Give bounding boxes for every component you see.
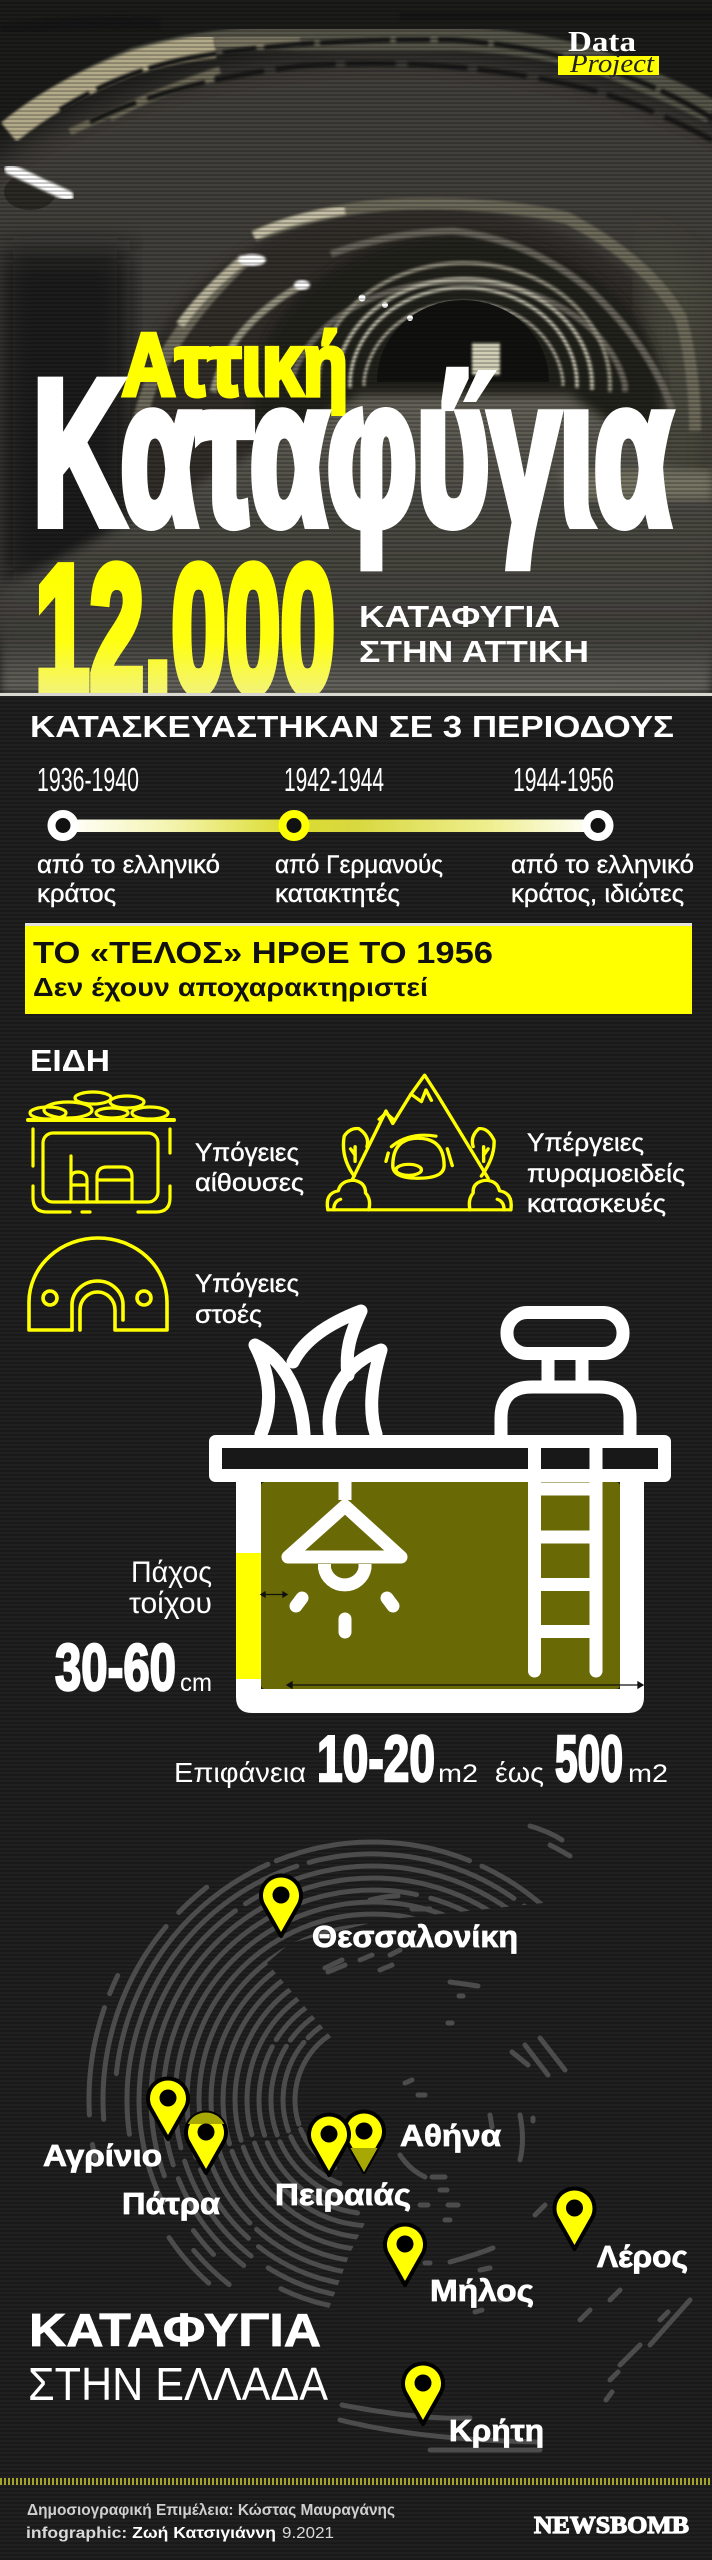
callout: the end in 1956 (25, 923, 692, 1014)
stat: 12.000 shelters: ΚΑΤΑΦΥΓΙΑ (359, 599, 560, 634)
credits (26, 2502, 395, 2542)
title: Αττική (122, 315, 348, 414)
period descriptions (37, 851, 694, 908)
label: pyramid structures: Υπέργειες (527, 1129, 644, 1157)
period descriptions: κράτος (37, 880, 116, 908)
stat: 12.000 shelters: ΣΤΗΝ ΑΤΤΙΚΗ (359, 634, 589, 669)
lights (4, 174, 56, 210)
period years: 1936-1940 (37, 761, 139, 798)
label: underground halls: Υπόγειες (195, 1139, 299, 1167)
icon: pyramid-shaped above-ground structure (327, 1075, 511, 1210)
icon: underground hall (28, 1092, 174, 1212)
label: surface area: έως (495, 1757, 544, 1788)
stat: 12.000 shelters (38, 560, 587, 693)
map of Greece: fingerprint arcs (86, 1824, 692, 2452)
timeline (37, 761, 694, 908)
pin: Patra (186, 2112, 226, 2173)
period years (37, 761, 614, 798)
period years: 1942-1944 (284, 761, 384, 798)
pin: Athina (344, 2111, 384, 2172)
label: underground halls (195, 1139, 304, 1197)
label: galleries (195, 1270, 299, 1329)
lamp (288, 1482, 401, 1632)
pin: Peiraias (309, 2114, 349, 2175)
heading: shelters in Greece: ΣΤΗΝ ΕΛΛΑΔΑ (28, 2358, 328, 2410)
map city labels: Πάτρα (122, 2186, 220, 2221)
heading: three periods: ΚΑΤΑΣΚΕΥΑΣΤΗΚΑΝ ΣΕ 3 ΠΕΡΙΟΔΟΥΣ (30, 709, 674, 744)
label: galleries: Υπόγειες (195, 1270, 299, 1298)
icon: underground galleries (29, 1238, 167, 1330)
label: wall thickness: 30-60 (55, 1630, 176, 1704)
arrow: surface width (287, 1682, 643, 1688)
logo: Data Project (558, 27, 659, 78)
hatch with handle (501, 1312, 630, 1436)
credits: 9.2021 (282, 2525, 334, 2542)
map city labels: Αγρίνιο (43, 2138, 162, 2173)
period descriptions: κράτος, ιδιώτες (511, 880, 684, 908)
period descriptions: από το ελληνικό (37, 851, 220, 879)
label: galleries: στοές (195, 1301, 262, 1329)
label: wall thickness (55, 1556, 212, 1704)
ground slab (216, 1442, 664, 1476)
label: pyramid structures (527, 1129, 685, 1218)
label: pyramid structures: κατασκευές (527, 1190, 666, 1218)
top right strands (530, 1826, 570, 1856)
ladder (534, 1445, 596, 1671)
portal rings (290, 281, 625, 392)
Crete strands (340, 2405, 540, 2450)
logo: Data Project: Data (568, 27, 636, 58)
map city labels: Λέρος (597, 2239, 688, 2274)
callout: the end in 1956: ΤΟ «ΤΕΛΟΣ» ΗΡΘΕ ΤΟ 1956 (33, 935, 493, 970)
period descriptions: από Γερμανούς (275, 851, 443, 879)
pin: Leros (554, 2188, 594, 2249)
logo: Data Project: Project (569, 49, 655, 78)
period descriptions: κατακτητές (275, 880, 400, 908)
label: pyramid structures: πυραμοειδείς (527, 1160, 685, 1188)
label: surface area: m2 (438, 1760, 478, 1788)
label: surface area: Επιφάνεια (174, 1757, 306, 1788)
pin: Kriti (403, 2363, 443, 2424)
heading: shelters in Greece (28, 2304, 328, 2410)
label: wall thickness: τοίχου (129, 1587, 212, 1620)
lower right strands (606, 2290, 690, 2400)
map city labels (43, 1919, 688, 2448)
label: surface area: m2 (628, 1760, 668, 1788)
map city labels: Μήλος (430, 2273, 534, 2308)
credits: Δημοσιογραφική Επιμέλεια: Κώστας Μαυραγάνης (27, 2502, 395, 2519)
label: surface area (174, 1722, 668, 1795)
pin: Thessaloniki (261, 1875, 301, 1936)
wall thickness highlight (236, 1553, 261, 1679)
top ribs (0, 5, 712, 11)
label: underground halls: αίθουσες (195, 1169, 304, 1197)
hero photo: underground tunnel (0, 0, 712, 745)
arrow: wall thickness (261, 1592, 287, 1597)
label: surface area: 10-20 (317, 1722, 435, 1795)
stat: 12.000 shelters: 12.000 (35, 529, 335, 730)
label: wall thickness: Πάχος (131, 1556, 212, 1589)
period years: 1944-1956 (513, 761, 614, 798)
shelter interior (261, 1482, 620, 1689)
map city labels: Κρήτη (449, 2413, 544, 2448)
heading: types: ΕΙΔΗ (30, 1043, 110, 1078)
pin: Milos (385, 2224, 425, 2285)
grass (255, 1311, 381, 1434)
callout: the end in 1956: Δεν έχουν αποχαρακτηριστεί (33, 972, 428, 1002)
map city labels: Πειραιάς (275, 2177, 411, 2212)
label: wall thickness: cm (180, 1669, 212, 1697)
shelter walls (236, 1482, 644, 1713)
credits: infographic: Ζωή Κατσιγιάννη (26, 2525, 276, 2542)
map pins (148, 1875, 594, 2424)
logo: Newsbomb: NEWSBOMB (534, 2513, 689, 2539)
period descriptions: από το ελληνικό (511, 851, 694, 879)
shelter cross-section diagram (216, 1311, 664, 1713)
label: surface area: 500 (555, 1722, 623, 1795)
map city labels: Αθήνα (400, 2118, 501, 2153)
centre strands (325, 1896, 430, 1972)
map city labels: Θεσσαλονίκη (312, 1919, 518, 1954)
heading: shelters in Greece: ΚΑΤΑΦΥΓΙΑ (29, 2304, 321, 2356)
middle ribs (254, 204, 695, 431)
pin: Agrinio (148, 2078, 188, 2139)
